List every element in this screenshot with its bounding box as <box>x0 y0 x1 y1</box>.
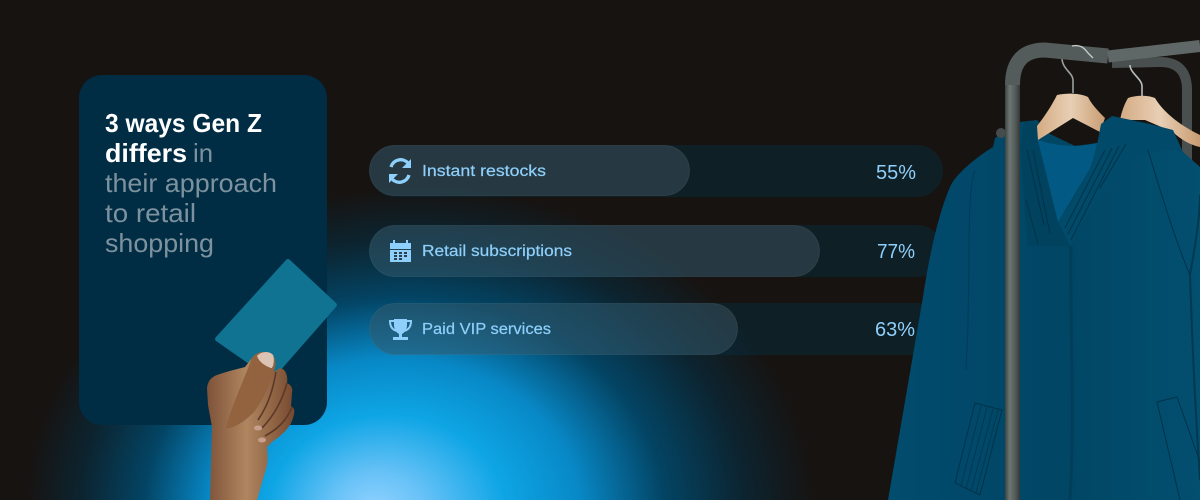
illustration: hand holding card <box>207 259 337 500</box>
inner shirt <box>1038 140 1097 222</box>
value: 63% <box>875 319 915 341</box>
jacket collar <box>955 116 1200 500</box>
card <box>215 259 337 380</box>
value: 55% <box>876 162 916 184</box>
icon: trophy <box>390 319 411 340</box>
icon: calendar <box>390 240 411 262</box>
thumbnail <box>257 352 274 368</box>
hanger: left <box>1037 58 1105 140</box>
heading: 3 ways Gen Z <box>105 108 262 138</box>
value: 77% <box>877 241 915 263</box>
left hood band <box>1020 120 1070 246</box>
heading: their approach <box>105 168 277 198</box>
bar: Instant restocks <box>369 145 943 197</box>
fingers <box>258 372 292 436</box>
panel: title card <box>79 75 327 425</box>
heading <box>105 108 277 258</box>
right hood band <box>1058 116 1183 246</box>
icon: refresh <box>389 159 411 183</box>
label: Retail subscriptions <box>422 243 572 260</box>
label: Paid VIP services <box>422 321 551 338</box>
pocket: right <box>1157 397 1200 462</box>
heading: shopping <box>105 228 214 258</box>
hanger: right <box>1120 65 1200 147</box>
finger nails <box>254 426 266 442</box>
pocket: left <box>955 403 1002 495</box>
bar: Retail subscriptions <box>369 225 943 277</box>
heading: in <box>193 138 213 168</box>
rack front pole <box>996 46 1200 500</box>
heading: differs <box>105 138 187 168</box>
thumb <box>226 352 275 428</box>
bar: Paid VIP services <box>369 303 943 355</box>
illustration: clothing rack with jacket <box>888 46 1200 500</box>
label: Instant restocks <box>422 163 546 180</box>
heading: to retail <box>105 198 196 228</box>
rack back <box>1112 62 1187 165</box>
jacket body <box>888 120 1200 500</box>
hand <box>207 352 294 500</box>
